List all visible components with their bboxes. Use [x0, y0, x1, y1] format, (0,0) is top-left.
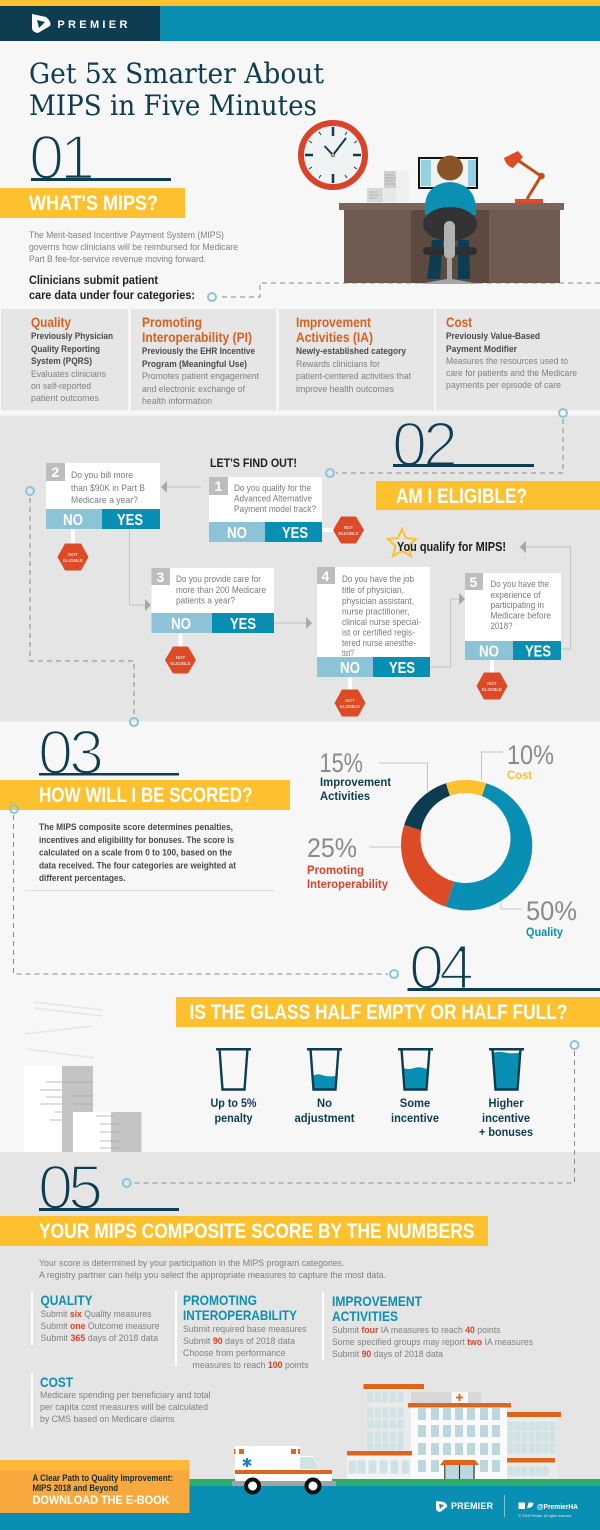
glass: some incentive: incentive [391, 1113, 439, 1125]
question box 1: Do you qualify for the [234, 483, 311, 494]
glass: some incentive: Some [400, 1098, 430, 1110]
scoring description: data received. The four categories are weighted at [39, 860, 237, 872]
glass: no adjustment [294, 1048, 355, 1125]
not eligible badge 5 [476, 660, 508, 700]
not eligible badge 3: ELIGIBLE [170, 661, 191, 666]
requirements: promoting interoperability: measures to reach 100 points [192, 1360, 309, 1371]
not eligible badge 4 [334, 677, 366, 716]
section 02 number: 02 [392, 410, 458, 480]
panel: improvement activities: Newly-established category [296, 346, 407, 357]
label: improvement activities 15%: 15% [320, 748, 363, 778]
panel: promoting interoperability: and electronic exchange of [142, 384, 245, 395]
section 02 number [392, 410, 534, 480]
requirements: cost: COST [40, 1374, 73, 1390]
heading: how will I be scored [0, 780, 290, 810]
requirements: improvement activities: Some specified groups may report two IA measures [332, 1337, 533, 1348]
question box 3 [152, 568, 274, 633]
panel: cost: Payment Modifier [446, 344, 517, 355]
not eligible badge 3 [165, 633, 196, 674]
requirements: improvement activities: IMPROVEMENT [332, 1293, 422, 1309]
section 05 intro [39, 1258, 386, 1281]
requirements: quality: Submit six Quality measures [40, 1309, 152, 1320]
scoring description: The MIPS composite score determines penalties, [39, 822, 233, 833]
label: improvement activities 15% [320, 748, 428, 803]
panel: cost: payments per episode of care [446, 380, 561, 391]
section 03 number: 03 [38, 718, 104, 788]
glass: some incentive [391, 1048, 439, 1125]
not eligible badge 4: NOT [345, 698, 355, 703]
not eligible badge 2: ELIGIBLE [63, 558, 83, 563]
arrow: box 3 to box 4 [274, 617, 312, 629]
panel: improvement activities: Activities (IA) [296, 329, 373, 345]
label: promoting interoperability 25%: Promoting [307, 863, 364, 877]
heading: am I eligible: AM I ELIGIBLE? [396, 485, 527, 508]
section 04 number: 04 [409, 933, 474, 1003]
section 04 number [408, 933, 600, 1003]
panel: quality: System (PQRS) [31, 356, 92, 367]
categories lead-in: care data under four categories: [29, 290, 195, 302]
panel: quality: Evaluates clinicians [31, 369, 106, 380]
result: you qualify for MIPS [388, 529, 506, 556]
glass: no adjustment: adjustment [294, 1113, 355, 1125]
requirements: promoting interoperability: Submit 90 days of 2018 data [183, 1336, 296, 1347]
panel: cost: Previously Value-Based [446, 331, 540, 342]
question box 5: YES [525, 644, 551, 660]
title: MIPS in Five Minutes [29, 89, 317, 122]
scoring description: incentives and eligibility for bonuses. The score is [39, 835, 234, 846]
illustration: papers [24, 1002, 142, 1152]
not eligible badge 3: NOT [176, 655, 186, 660]
question box 1: YES [282, 525, 308, 542]
requirements: quality: QUALITY [40, 1292, 93, 1308]
panel: section 05 background [0, 1152, 600, 1482]
arrow: box 2 to box 3 [130, 529, 151, 611]
glass: higher incentive and bonuses: + bonuses [479, 1127, 533, 1139]
title: Get 5x Smarter About [29, 57, 325, 90]
glass: up to 5% penalty [210, 1048, 256, 1125]
panel: quality: patient outcomes [31, 393, 99, 404]
call to action: download e-book: A Clear Path to Quality Improvement: [32, 1473, 173, 1484]
panel: improvement activities: improve health outcomes [296, 384, 394, 395]
requirements: promoting interoperability: INTEROPERABILITY [183, 1307, 298, 1323]
question box 1 [209, 477, 322, 542]
categories lead-in [29, 275, 195, 302]
result: you qualify for MIPS: You qualify for MIPS! [397, 539, 506, 554]
question box 2: Do you bill more [71, 470, 133, 481]
question box 2: YES [117, 512, 143, 529]
panel: promoting interoperability: Interoperability (PI) [142, 329, 252, 345]
question box 5: 2018? [490, 621, 512, 632]
question box 4: tist? [342, 648, 354, 659]
label: quality 50%: Quality [526, 925, 563, 939]
not eligible badge 1: ELIGIBLE [338, 531, 359, 536]
question box 4: YES [389, 660, 415, 677]
requirements: cost: per capita cost measures will be calculated [40, 1402, 208, 1413]
question box 2: NO [63, 512, 83, 529]
not eligible badge 2: NOT [68, 552, 78, 557]
panel: promoting interoperability [131, 309, 276, 410]
arrow: box 1 to box 2 [161, 481, 201, 493]
question box 3: more than 200 Medicare [176, 585, 266, 596]
dashed connector from section 04 to section 05 [123, 1041, 578, 1187]
illustration: ambulance [232, 1446, 336, 1492]
requirements: quality: Submit 365 days of 2018 data [40, 1333, 159, 1344]
requirements: improvement activities: ACTIVITIES [332, 1308, 398, 1324]
footer logo [436, 1501, 494, 1512]
panel: cost: care for patients and the Medicare [446, 368, 577, 379]
label: promoting interoperability 25% [307, 833, 401, 891]
question box 4: title of physician, [342, 585, 404, 596]
panel: quality: Quality [31, 314, 71, 330]
glass: up to 5% penalty: penalty [214, 1113, 253, 1125]
question box 2: 2 [52, 464, 60, 480]
panel: promoting interoperability: Previously the EHR Incentive [142, 346, 255, 357]
question box 5: 5 [470, 574, 478, 590]
question box 4: Do you have the job [342, 574, 414, 585]
panel: improvement activities [279, 309, 434, 410]
requirements: promoting interoperability: Choose from performance [183, 1348, 286, 1359]
requirements: improvement activities [322, 1292, 533, 1360]
question box 3: patients a year? [176, 596, 235, 606]
footer social handle: @PremierHA [537, 1502, 579, 1511]
requirements: quality: Submit one Outcome measure [40, 1321, 160, 1332]
dashed connector from section 02 to section 03 [26, 487, 138, 726]
panel: cost [436, 309, 600, 410]
icon: wall clock [301, 123, 365, 187]
scoring description: different percentages. [39, 873, 126, 884]
question box 4: 4 [322, 568, 330, 584]
illustration: hospital [347, 1384, 561, 1479]
question box 3: Do you provide care for [176, 574, 261, 585]
label: quality 50% [501, 896, 577, 939]
label: promoting interoperability 25%: 25% [307, 833, 357, 863]
glass: higher incentive and bonuses: Higher [488, 1098, 524, 1110]
heading: composite score by the numbers: YOUR MIPS COMPOSITE SCORE BY THE NUMBERS [39, 1220, 474, 1243]
panel: promoting interoperability: Program (Meaningful Use) [142, 359, 247, 370]
question box 1: 1 [214, 478, 222, 494]
question box 4: NO [340, 660, 360, 677]
footer social handle [504, 1495, 579, 1518]
heading: what's MIPS: WHAT'S MIPS? [29, 192, 158, 215]
scoring description [25, 822, 275, 891]
panel: quality [1, 309, 128, 410]
panel: quality: on self-reported [31, 381, 91, 392]
question box 5 [465, 573, 561, 660]
header bar: PREMIER [57, 19, 127, 31]
header bar [0, 0, 600, 41]
label: improvement activities 15%: Improvement [320, 775, 391, 789]
requirements: improvement activities: Submit 90 days of 2018 data [332, 1349, 444, 1360]
dashed connector 01 to categories [208, 283, 600, 301]
question box 3: 3 [156, 569, 164, 585]
glass: no adjustment: No [317, 1098, 332, 1110]
question box 2 [46, 463, 160, 529]
intro text: The Merit-based Incentive Payment System (MIPS) [29, 230, 224, 241]
question box 2: Medicare a year? [71, 495, 138, 506]
panel: quality: Previously Physician [31, 331, 113, 342]
arrow: box 4 to box 5 [430, 593, 465, 667]
intro text: Part B fee-for-service revenue moving forward. [29, 254, 206, 265]
question box 5: Do you have the [490, 579, 549, 590]
panel: promoting interoperability: Promotes patient engagement [142, 371, 259, 382]
question box 1: Payment model track? [234, 504, 316, 515]
question box 1: Advanced Alternative [234, 494, 312, 504]
panel: cost: Cost [446, 314, 472, 330]
section 05 number [38, 1153, 179, 1223]
question box 3: YES [230, 616, 256, 633]
question box 4: nurse practitioner, [342, 606, 410, 618]
panel: quality: Quality Reporting [31, 344, 100, 355]
question box 4: ist or certified regis- [342, 628, 415, 638]
label: quality 50%: 50% [526, 896, 577, 926]
panel: improvement activities: Rewards clinicians for [296, 359, 380, 370]
footer logo: PREMIER [451, 1501, 494, 1511]
question box 5: Medicare before [490, 610, 551, 622]
question box 4: clinical nurse special- [342, 617, 421, 628]
panel: section 02 background [0, 416, 600, 722]
label: cost 10% [482, 740, 554, 782]
section 01 number [29, 123, 171, 193]
not eligible badge 1 [322, 516, 364, 544]
section 05 intro: A registry partner can help you select the appropriate measures to capture the most data. [39, 1270, 386, 1281]
label: improvement activities 15%: Activities [320, 789, 370, 803]
glass: higher incentive and bonuses [479, 1048, 533, 1139]
question box 5: experience of [490, 590, 541, 601]
question box 4 [317, 567, 430, 677]
requirements: cost [31, 1373, 210, 1428]
scoring description: calculated on a scale from 0 to 100, based on the [39, 848, 232, 858]
footer social handle: © 2018 Premier. All rights reserved. [518, 1514, 572, 1518]
panel: cost: Measures the resources used to [446, 356, 568, 367]
call to action: download e-book: DOWNLOAD THE E-BOOK [32, 1495, 170, 1507]
intro text [29, 230, 238, 265]
question box 4: tered nurse anesthe- [342, 638, 416, 649]
glass: up to 5% penalty: Up to 5% [210, 1098, 256, 1110]
section 01 number: 01 [29, 123, 95, 193]
not eligible badge 4: ELIGIBLE [340, 704, 360, 709]
requirements: promoting interoperability: PROMOTING [183, 1292, 257, 1308]
panel: improvement activities: patient-centered activities that [296, 371, 411, 382]
requirements: promoting interoperability: Submit required base measures [183, 1324, 307, 1335]
not eligible badge 5: ELIGIBLE [482, 687, 502, 692]
illustration: clinician at desk [339, 151, 564, 284]
dashed connector into section 02 [326, 409, 567, 477]
heading: let's find out: LET'S FIND OUT! [210, 456, 297, 470]
requirements: quality [31, 1292, 160, 1345]
requirements: improvement activities: Submit four IA measures to reach 40 points [332, 1325, 501, 1336]
not eligible badge 5: NOT [487, 681, 497, 686]
categories lead-in: Clinicians submit patient [29, 275, 158, 287]
panel: promoting interoperability: Promoting [142, 314, 202, 330]
glass: higher incentive and bonuses: incentive [482, 1113, 530, 1125]
question box 3: NO [171, 616, 191, 633]
question box 5: NO [479, 644, 499, 660]
label: promoting interoperability 25%: Interoperability [307, 877, 388, 891]
heading: how will I be scored: HOW WILL I BE SCORED? [39, 784, 252, 807]
question box 4: physician assistant, [342, 596, 414, 607]
requirements: cost: by CMS based on Medicare claims [40, 1414, 175, 1425]
label: cost 10%: Cost [507, 768, 532, 782]
heading: composite score by the numbers [0, 1216, 488, 1246]
call to action: download e-book: MIPS 2018 and Beyond [32, 1483, 118, 1494]
not eligible badge 1: NOT [344, 525, 354, 530]
heading: am I eligible [376, 481, 600, 510]
donut chart [401, 780, 532, 910]
requirements: cost: Medicare spending per beneficiary and total [40, 1390, 210, 1401]
footer ground [0, 1479, 600, 1530]
section 05 number: 05 [38, 1153, 103, 1223]
question box 2: than $90K in Part B [71, 483, 145, 494]
arrow: box 5 to result [520, 541, 570, 649]
not eligible badge 2 [58, 529, 88, 570]
label: cost 10%: 10% [507, 740, 554, 770]
call to action: download e-book [0, 1460, 190, 1513]
requirements: promoting interoperability [175, 1291, 309, 1371]
question box 5: participating in [490, 600, 544, 611]
section 05 intro: Your score is determined by your participation in the MIPS program categories. [39, 1258, 344, 1269]
title [29, 57, 325, 122]
heading: what's MIPS [0, 188, 185, 218]
panel: improvement activities: Improvement [296, 314, 371, 330]
dashed connector from section 03 to section 04 [10, 805, 398, 978]
question box 1: NO [227, 525, 247, 542]
panel: promoting interoperability: health information [142, 396, 212, 407]
intro text: governs how clinicians will be reimbursed for Medicare [29, 242, 238, 253]
